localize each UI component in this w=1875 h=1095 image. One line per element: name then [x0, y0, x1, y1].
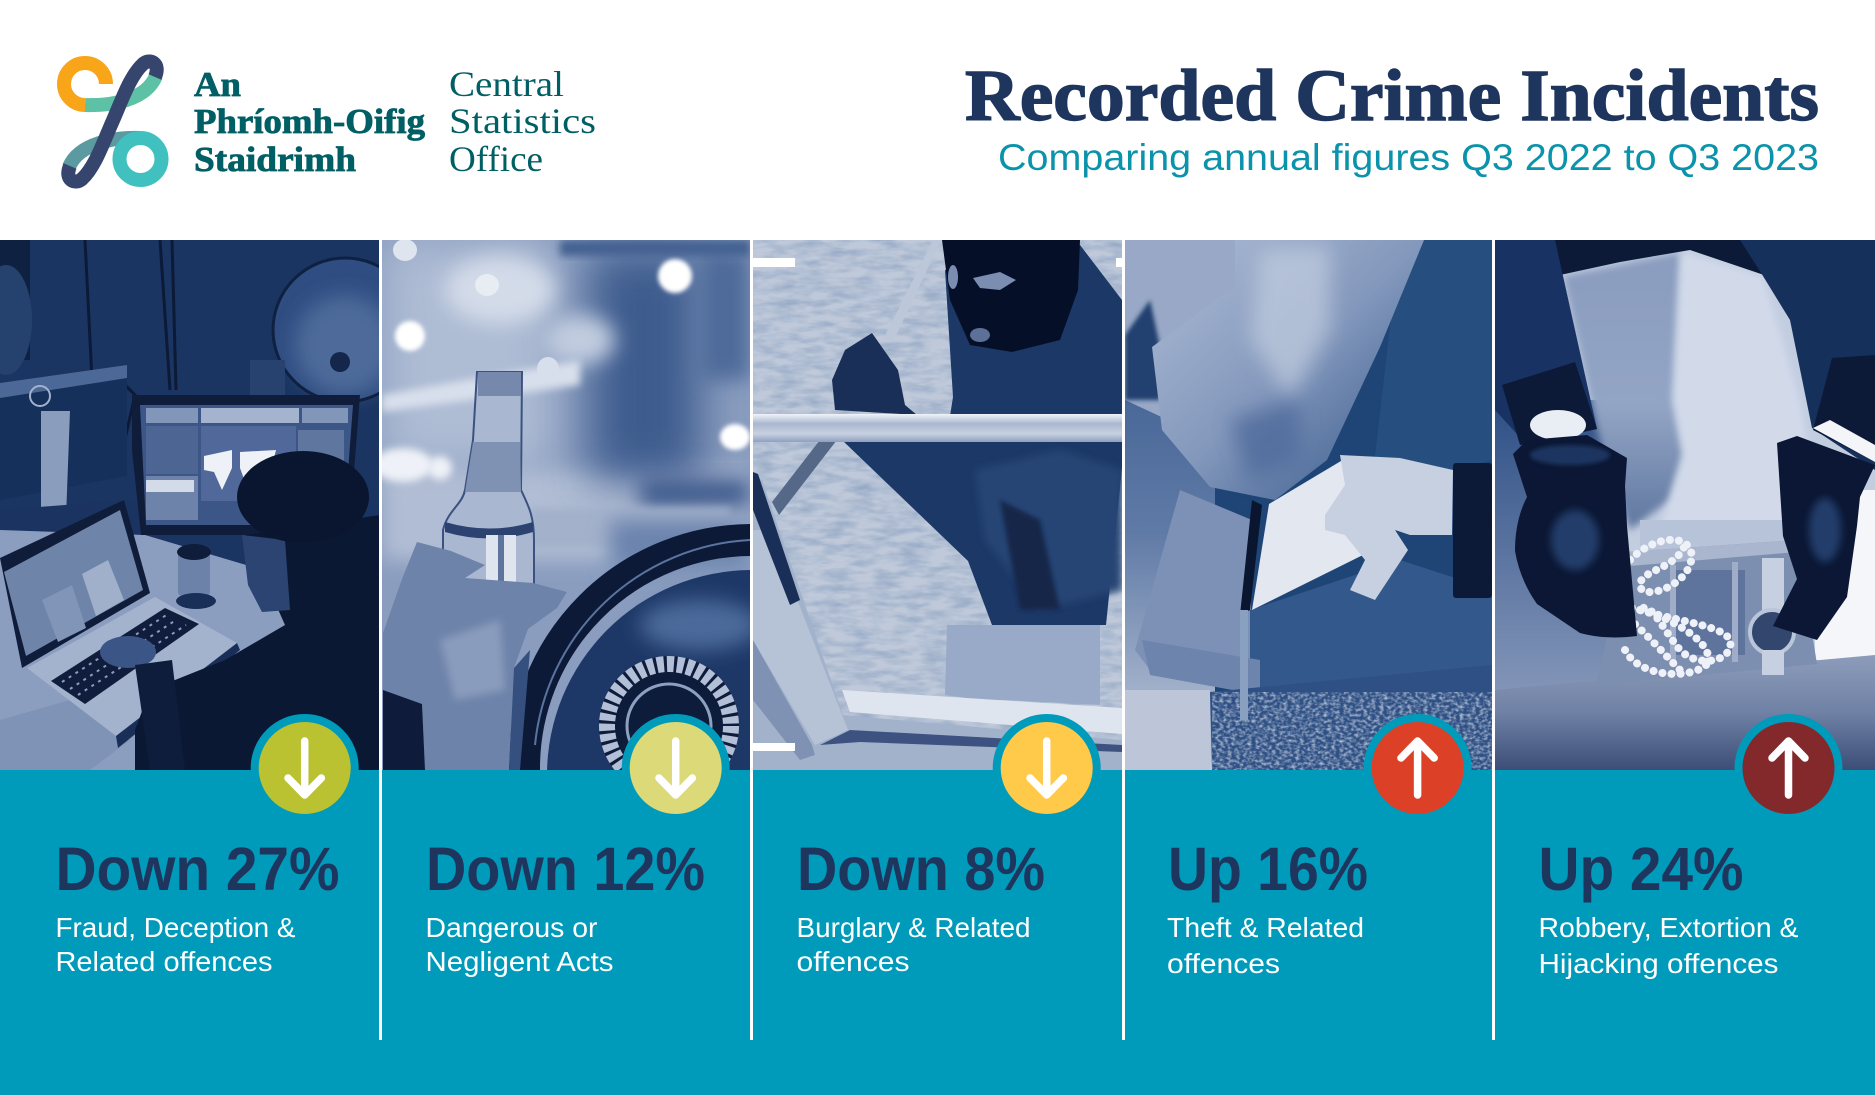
white wrists: [1530, 410, 1586, 440]
jacket below bar: [842, 440, 1122, 625]
desk: [0, 530, 300, 770]
icon: CSO knot symbol: [64, 62, 162, 181]
left monitor: [116, 379, 127, 470]
window bar: [753, 414, 1122, 442]
photo: pickpocket: [1125, 240, 1492, 770]
jacket sleeve back: [1125, 240, 1240, 420]
photo: hacker at computers: [0, 240, 417, 770]
mask: [942, 240, 1080, 352]
description: offences: [796, 946, 910, 977]
subtitle: Comparing annual figures Q3 2022 to Q3 2023: [998, 137, 1819, 178]
hand: [383, 542, 567, 770]
teal band: [0, 770, 1875, 1095]
top jacket: [1555, 240, 1762, 274]
logo text: English name: Central: [449, 64, 564, 104]
description: [56, 912, 296, 977]
panel: fraud: [56, 714, 359, 977]
legs: [945, 625, 1100, 705]
logo text: Irish name: Phríomh-Oifig: [194, 102, 426, 141]
description: offences: [1167, 948, 1280, 979]
headline: Up 16%: [1168, 835, 1368, 903]
jewellery box: [1596, 540, 1817, 685]
panel: burglary: [796, 714, 1101, 977]
jacket lower left: [1135, 490, 1252, 668]
bottle: [443, 372, 534, 600]
logo text: Irish name: An: [194, 65, 241, 104]
zipper: [1240, 500, 1262, 615]
headline: Down 8%: [797, 835, 1045, 903]
center monitor: [132, 395, 360, 535]
description: [426, 912, 614, 977]
description: Negligent Acts: [426, 946, 614, 977]
logo: [64, 62, 596, 181]
jacket body: [1376, 240, 1492, 470]
cup: [178, 555, 210, 596]
world map: [204, 450, 276, 490]
headline: Down 27%: [56, 835, 340, 903]
left glove: [1513, 435, 1637, 637]
photo: drink driving: [382, 240, 750, 770]
description: [1538, 912, 1798, 979]
cuff: [1453, 463, 1492, 598]
panel: theft: [1167, 714, 1472, 979]
icon: up arrow badge: [1734, 714, 1842, 822]
photo: gloved hands with jewellery: [1495, 240, 1875, 770]
laptop screen: [0, 500, 150, 668]
headline: Up 24%: [1538, 835, 1744, 903]
bokeh lights: [373, 239, 750, 482]
description: [1167, 912, 1364, 979]
glove: [832, 333, 917, 415]
description: Fraud, Deception &: [56, 912, 296, 943]
jeans: [1125, 690, 1210, 736]
photo: burglar at window: [753, 240, 1122, 770]
surface: [1495, 655, 1875, 770]
logo text: English name: Office: [449, 139, 543, 179]
column dividers: [379, 240, 1495, 1040]
drape: [1563, 252, 1683, 530]
hand: [1325, 455, 1453, 600]
title: Recorded Crime Incidents: [965, 55, 1819, 136]
white background right: [1815, 490, 1875, 660]
pearls: [1590, 540, 1730, 674]
logo text: Irish name: [194, 65, 426, 179]
logo text: English name: [449, 64, 596, 179]
description: Hijacking offences: [1538, 948, 1778, 979]
panel: dangerous acts: [426, 714, 730, 977]
wallet: [1252, 458, 1371, 610]
crowbar: [886, 242, 938, 336]
fan: [274, 260, 379, 399]
icon: down arrow badge: [993, 714, 1101, 822]
sleeve: [1152, 240, 1424, 500]
right glove: [1773, 436, 1875, 640]
description: Theft & Related: [1167, 912, 1364, 943]
watch: [1762, 558, 1784, 618]
icon: down arrow badge: [251, 714, 359, 822]
icon: up arrow badge: [1364, 714, 1472, 822]
logo text: English name: Statistics: [449, 101, 596, 141]
icon: down arrow badge: [622, 714, 730, 822]
speedometer: [599, 656, 739, 770]
description: Burglary & Related: [796, 912, 1030, 943]
steering wheel and dash: [547, 570, 750, 770]
panel: robbery: [1538, 714, 1842, 979]
description: Related offences: [56, 946, 272, 977]
logo text: Irish name: Staidrimh: [194, 140, 356, 179]
description: [796, 912, 1030, 977]
description: Robbery, Extortion &: [1538, 912, 1798, 943]
window frame: [753, 472, 1122, 770]
white marks: [753, 258, 795, 267]
headline: Down 12%: [426, 835, 705, 903]
person: [135, 515, 380, 770]
description: Dangerous or: [426, 912, 598, 943]
left sleeve: [1495, 240, 1597, 445]
jacket above bar: [945, 245, 1122, 416]
laptop base: [27, 597, 237, 736]
